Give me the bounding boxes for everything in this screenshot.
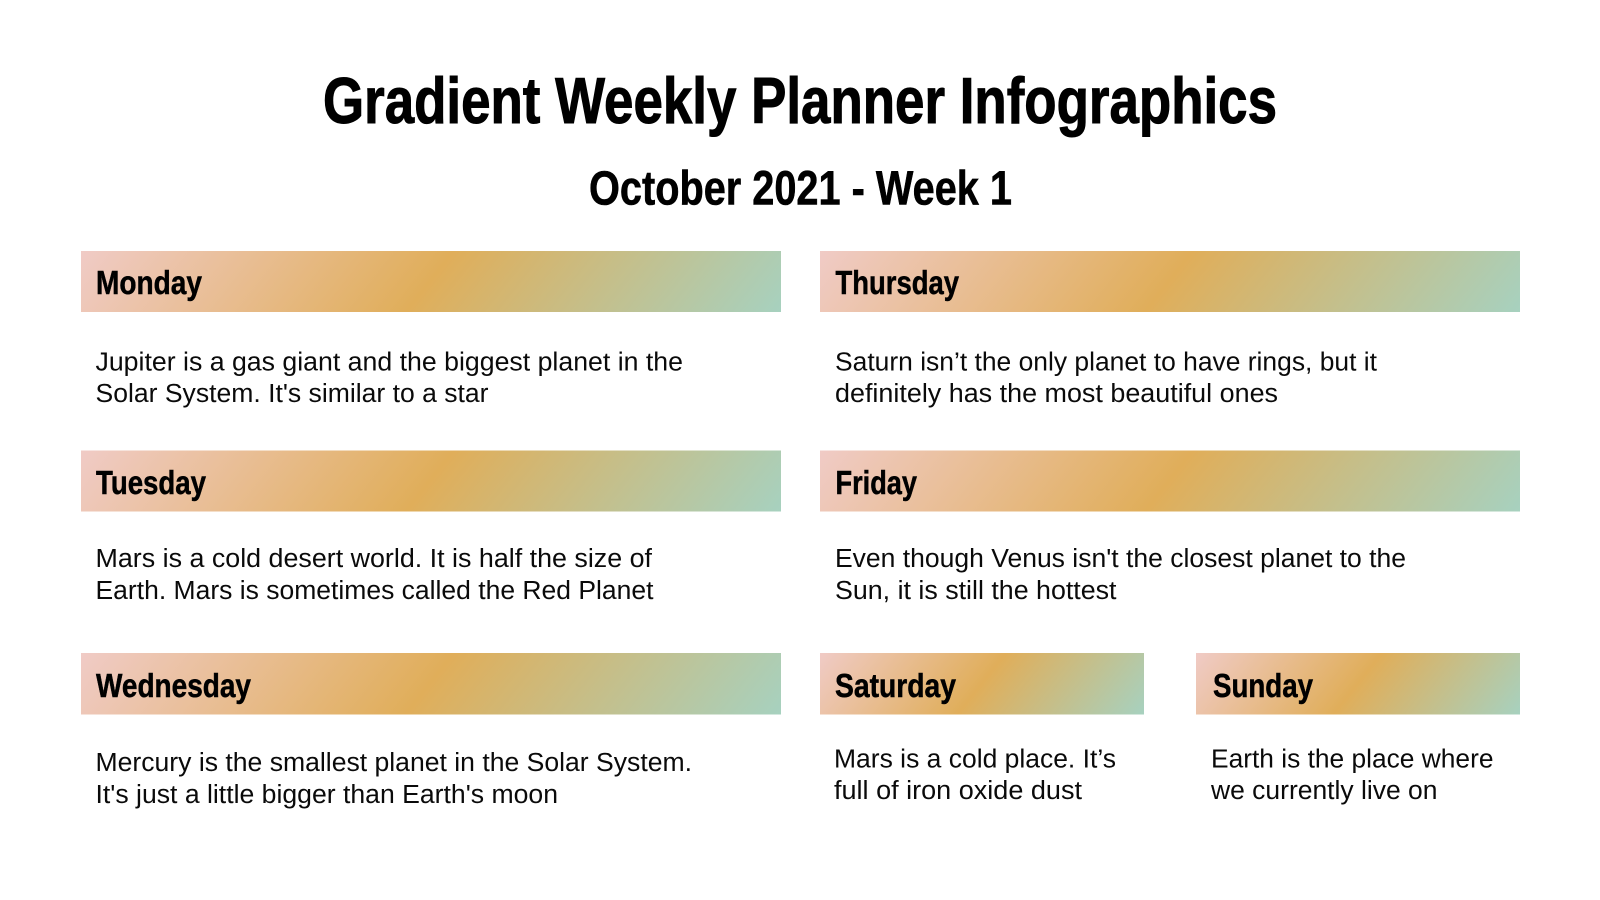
Tuesday description: Earth. Mars is sometimes called the Red Planet	[96, 577, 654, 605]
Monday description: Jupiter is a gas giant and the biggest planet in the	[96, 348, 683, 376]
panel: Sunday	[1196, 653, 1520, 805]
panel: Friday	[820, 450, 1520, 605]
Tuesday heading: Tuesday	[96, 464, 207, 501]
Thursday header bar	[820, 251, 1520, 312]
Saturday description	[834, 746, 1116, 805]
panel: Wednesday	[81, 653, 781, 809]
Wednesday description: It's just a little bigger than Earth's moon	[96, 781, 558, 809]
Saturday description: full of iron oxide dust	[834, 777, 1082, 805]
Thursday description	[835, 348, 1377, 408]
Thursday description: definitely has the most beautiful ones	[835, 380, 1278, 408]
Monday description: Solar System. It's similar to a star	[96, 380, 489, 408]
Monday header bar	[81, 251, 781, 312]
Monday heading: Monday	[96, 264, 203, 301]
Monday description	[96, 348, 683, 408]
Saturday heading: Saturday	[835, 667, 957, 704]
Friday description: Sun, it is still the hottest	[835, 577, 1116, 605]
title: Gradient Weekly Planner Infographics	[323, 64, 1277, 137]
panel: Tuesday	[81, 450, 781, 605]
Tuesday description	[96, 545, 654, 605]
Wednesday description: Mercury is the smallest planet in the Solar System.	[96, 749, 692, 777]
Friday description: Even though Venus isn't the closest planet to the	[835, 545, 1406, 573]
Saturday description: Mars is a cold place. It’s	[834, 746, 1116, 774]
Tuesday description: Mars is a cold desert world. It is half the size of	[96, 545, 653, 573]
Saturday header bar	[820, 653, 1144, 714]
Wednesday header bar	[81, 653, 781, 714]
Wednesday description	[96, 749, 692, 809]
subtitle: October 2021 - Week 1	[589, 162, 1012, 216]
Sunday description	[1210, 746, 1494, 805]
Sunday header bar	[1196, 653, 1520, 714]
panel: Saturday	[820, 653, 1144, 805]
panel: Thursday	[820, 251, 1520, 408]
Thursday heading: Thursday	[836, 264, 960, 301]
Friday heading: Friday	[836, 464, 918, 501]
Friday header bar	[820, 450, 1520, 512]
panel: Monday	[81, 251, 781, 408]
Sunday description: Earth is the place where	[1211, 746, 1494, 774]
Sunday description: we currently live on	[1210, 777, 1438, 805]
Friday description	[835, 545, 1406, 605]
Sunday heading: Sunday	[1213, 667, 1314, 704]
Tuesday header bar	[81, 450, 781, 512]
Wednesday heading: Wednesday	[96, 667, 252, 704]
Thursday description: Saturn isn’t the only planet to have rings, but it	[835, 348, 1377, 376]
